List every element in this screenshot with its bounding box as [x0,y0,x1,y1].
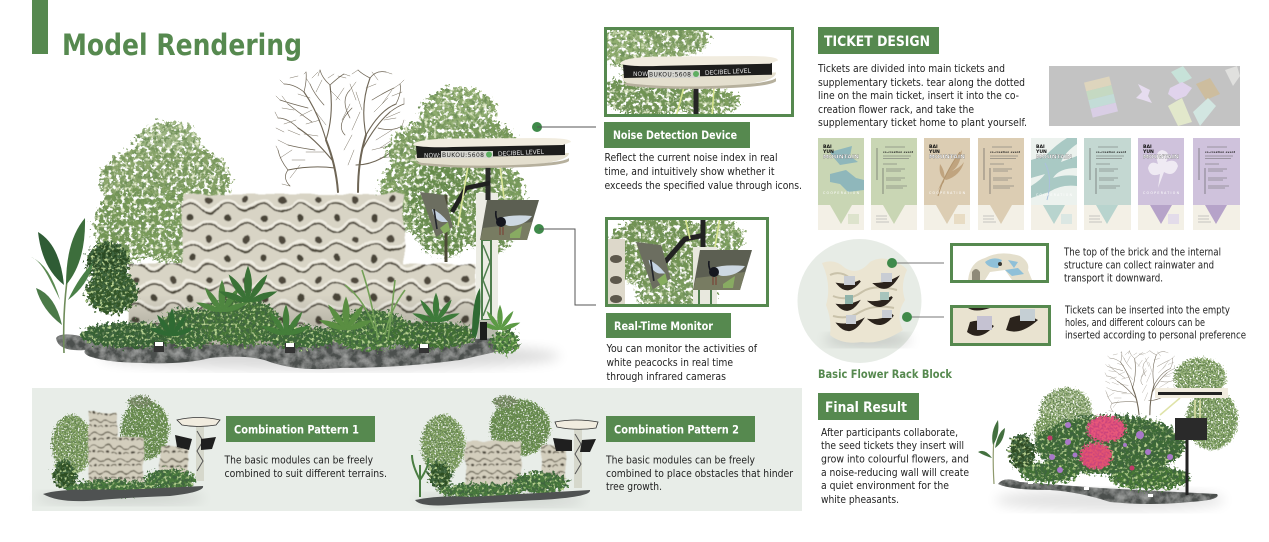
ticket 3 front: COOPERATION [1036,193,1073,197]
ticket 2 front: MOUNTAIN [929,154,965,160]
heading [606,313,731,338]
monitor pole [452,166,504,338]
title accent bar [32,0,48,54]
ticket 3 back: co-creation event [1096,150,1127,154]
final result text: grow into colourful flowers, and [821,454,969,466]
detail: ticket holes [952,306,1050,344]
detail image: monitors [608,220,752,304]
noise reducing wall [129,194,475,350]
ticket 2 back: co-creation event [990,150,1021,154]
rainwater text: The top of the brick and the internal [1063,246,1221,258]
panel: combination patterns: Combination Pattern 2 [614,422,739,436]
description [604,152,802,192]
heading [604,122,750,148]
heading: final result [818,393,919,420]
ticket 1 front: YUN [822,149,834,155]
ticket 3 front: MOUNTAIN [1036,154,1072,160]
ticket 3 back [1084,138,1131,230]
ground shadow [100,342,560,370]
basic flower rack block illustration [798,239,922,363]
detail image: device: NOW: [633,71,650,78]
detail image: device: DECIBEL LEVEL [705,68,752,77]
ground lights [154,322,487,353]
left green tree [94,122,230,264]
callout leader: noise device [532,122,596,132]
main model rendering [31,70,571,370]
final result text: white pheasants. [821,494,899,506]
final result scene [978,351,1238,511]
combination pattern 1 text [224,454,387,480]
combination pattern 2 text: The basic modules can be freely [605,454,755,466]
ticket description: supplementary ticket home to plant yourself. [818,117,1027,129]
panel: real-time monitor [605,216,769,383]
combination pattern 1 text: combined to suit different terrains. [224,468,387,480]
ticket 1 front: MOUNTAIN [823,154,859,160]
callout leader: monitor [534,224,596,305]
ticket 3 front [1031,138,1077,230]
rainwater text [1063,246,1221,284]
ticket mockup photo [1049,66,1240,126]
stone ground [56,334,520,369]
description: white peacocks in real time [606,357,733,369]
bare tree [275,70,404,192]
ticket description: line on the main ticket, insert it into the co- [818,90,1019,102]
ticket description: Tickets are divided into main tickets and [817,63,1005,75]
ticket 1 front: BAI [823,144,832,150]
ticket 3 front: YUN [1035,149,1047,155]
ticket 2 front [924,138,970,230]
detail: rainwater collection [952,244,1048,282]
panel: noise detection device [599,23,802,192]
green tree trunk [444,195,448,262]
title: Model Rendering [62,28,302,62]
ticket 3 front: BAI [1036,144,1045,150]
ticket description [817,63,1027,129]
final result text: the seed tickets they insert will [821,440,964,452]
ticket 4 front: MOUNTAIN [1143,154,1179,160]
ticket 1 back [871,138,917,230]
ticket 4 front: YUN [1142,149,1154,155]
combination pattern 1 scene [35,396,220,505]
noise detection device [413,138,571,168]
ticket 4 front: BAI [1143,144,1152,150]
callout dots and leaders for block [887,258,944,322]
banana plant [31,218,93,353]
noise detection device: BUKOU:5608 [442,152,484,159]
description: through infrared cameras [606,371,726,383]
ticket 1 front [818,138,864,230]
panel: combination patterns: Combination Pattern 1 [234,422,359,436]
noise detection device: DECIBEL LEVEL [498,149,545,158]
tropical leaf clusters [149,266,521,338]
panel: noise detection device: Noise Detection Device [613,128,737,142]
description [606,343,757,383]
ticket description: supplementary tickets. tear along the dotted [818,77,1025,89]
image frame [606,28,792,116]
ticket 4 front [1138,138,1184,230]
ticket 2 front: BAI [929,144,938,150]
right monitor [480,200,539,240]
ticket insert text [1064,304,1246,342]
description: Reflect the current noise index in real [604,152,778,164]
ticket 2 front: YUN [928,149,940,155]
panel: combination patterns [32,388,802,511]
dark shrub tree [86,242,138,314]
ticket 4 back: co-creation event [1205,150,1236,154]
combination pattern 2 scene [412,396,598,507]
ground planting [80,266,521,354]
panel: real-time monitor: Real-Time Monitor [614,319,713,333]
ticket insert text: Tickets can be inserted into the empty [1064,304,1230,316]
noise detection device: NOW: [424,152,441,159]
combination pattern 2 heading [606,416,755,442]
heading: ticket design [818,27,939,54]
ticket description: creation flower rack, and take the [818,104,974,116]
combination pattern 1 text: The basic modules can be freely [224,454,373,466]
combination pattern 1 heading [226,416,375,442]
ticket 4 back [1193,138,1240,230]
ticket 1 back: co-creation event [883,150,914,154]
description: You can monitor the activities of [606,343,757,355]
heading: final result: Final Result [825,400,907,416]
description: time, and intuitively show whether it [604,166,774,178]
rainwater text: structure can collect rainwater and [1064,260,1214,272]
final result text [821,427,969,506]
combination pattern 2 text [605,454,794,493]
final result text: a quiet environment for the [821,480,949,492]
image frame [606,218,768,306]
detail image: device: BUKOU:5608 [649,72,691,78]
rainwater text: transport it downward. [1064,272,1163,284]
heading: ticket design: TICKET DESIGN [824,34,930,50]
ticket 2 back [978,138,1024,230]
description: exceeds the specified value through icons. [604,180,802,192]
ticket 1 front: COOPERATION [823,191,860,195]
right green tree [380,88,524,257]
combination pattern 2 text: combined to place obstacles that hinder [606,468,794,480]
detail image: device [607,30,778,114]
ticket insert text: holes, and different colours can be [1065,317,1205,329]
final result text: After participants collaborate, [821,427,958,439]
block caption: Basic Flower Rack Block [818,367,952,381]
ticket 4 front: COOPERATION [1143,191,1180,195]
ticket 2 front: COOPERATION [929,191,966,195]
final result text: a noise-reducing wall will create [821,467,969,479]
combination pattern 2 text: tree growth. [606,481,662,493]
left monitor [420,192,453,237]
